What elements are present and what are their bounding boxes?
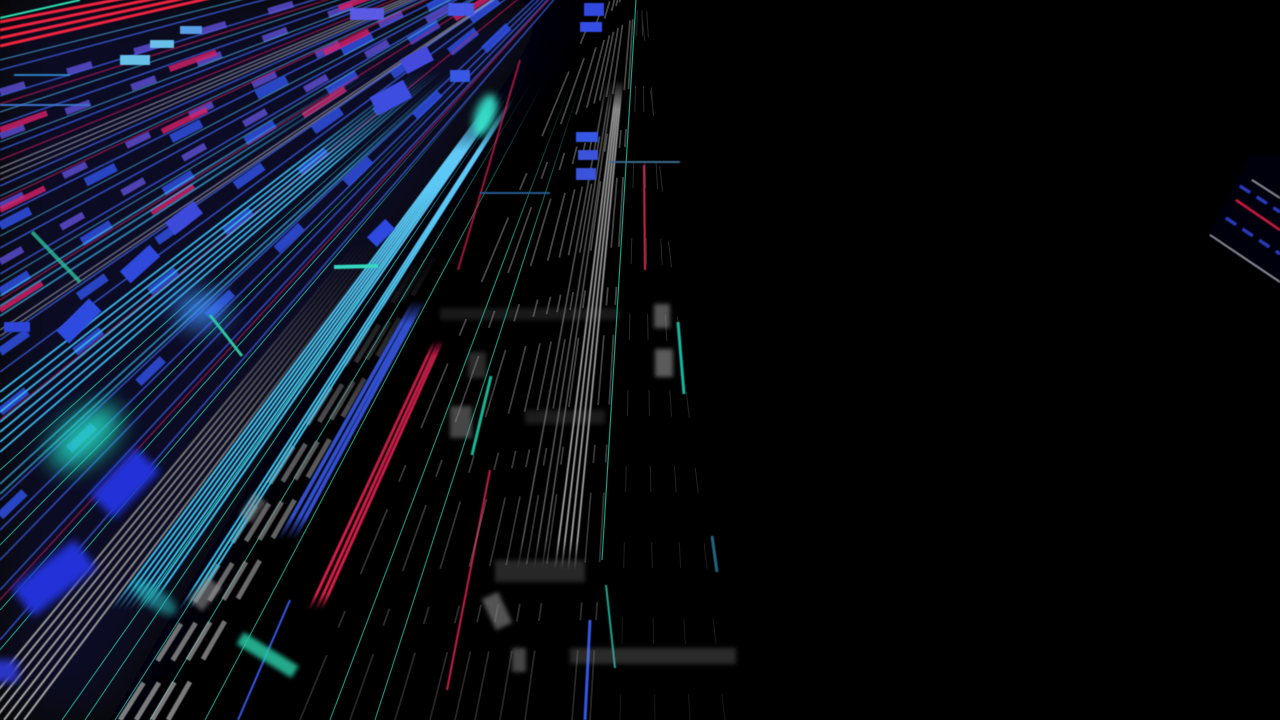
top-left red and magenta streams xyxy=(0,0,640,720)
blue and red mid rays xyxy=(178,0,645,720)
grey blocks xyxy=(188,304,736,672)
grey band lower-left xyxy=(0,0,640,720)
bright cyan central band xyxy=(30,0,640,720)
glowing hot spots xyxy=(39,91,502,621)
right grey columns xyxy=(490,0,640,720)
teal accent bars xyxy=(32,232,717,672)
left diagonal cyan streams xyxy=(0,0,640,494)
large blue glow blocks xyxy=(0,447,160,682)
right teal ray xyxy=(602,0,636,560)
navy haze behind streams xyxy=(0,0,560,720)
upper-left blue streams xyxy=(0,0,640,640)
faint dashed rays xyxy=(300,0,725,720)
distant fragment at right edge xyxy=(1208,155,1280,285)
upper blocks row xyxy=(0,3,680,344)
teal accent rays xyxy=(0,0,640,720)
